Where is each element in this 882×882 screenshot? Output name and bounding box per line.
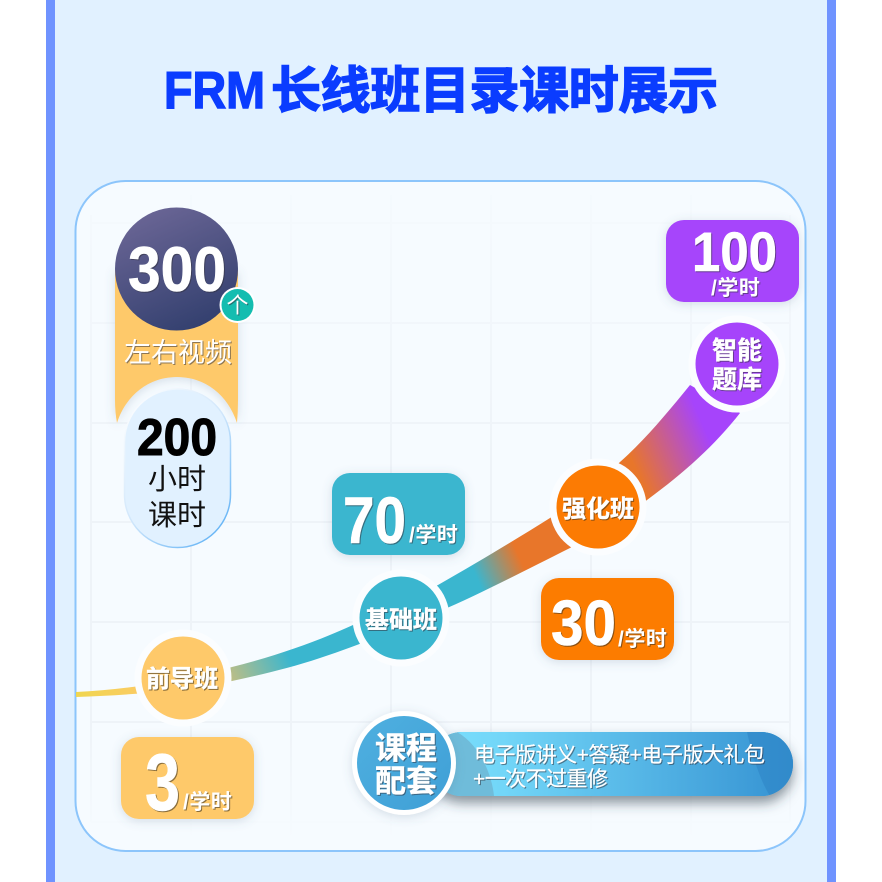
stage: 强化班: 强化班: [562, 496, 634, 523]
number: 300: 300: [128, 235, 226, 305]
hours box: 前导班 3: /学时: [183, 790, 232, 814]
title: 长线班目录课时展示: [271, 63, 718, 119]
pill: 200 hours: [124, 389, 230, 548]
stage: 智能题库: [688, 316, 786, 412]
seal: 课程配套: [352, 711, 456, 815]
course extras bar: 电子版讲义+答疑+电子版大礼包: [474, 744, 765, 767]
curve: learning path: [76, 385, 740, 697]
seal: 课程配套: 课程: [375, 731, 437, 766]
pill: 200 hours: 小时: [148, 463, 206, 496]
stage: 基础班: [352, 570, 450, 666]
hours box: 基础班 70: /学时: [409, 523, 458, 547]
label: 左右视频: 左右视频: [124, 338, 232, 368]
pill: 200 hours: 课时: [148, 499, 206, 532]
seal: 课程配套: 配套: [375, 764, 437, 799]
hours box: 强化班 30: /学时: [618, 627, 667, 651]
circle: 300: [115, 208, 238, 330]
badge: 个: 个: [226, 293, 249, 318]
stage: 前导班: [134, 630, 232, 726]
stage: 智能题库: 智能: [712, 337, 762, 365]
stage: 强化班: [550, 458, 646, 556]
stage: 智能题库: 题库: [712, 366, 762, 394]
hours box: 强化班 30: [541, 578, 674, 660]
pill: 200 hours: 200: [137, 409, 217, 467]
course extras bar: +一次不过重修: [473, 768, 608, 791]
badge: 个: [220, 287, 256, 323]
hours box: 前导班 3: 3: [145, 738, 180, 828]
hours box: 前导班 3: [121, 737, 254, 828]
hours box: 智能题库 100: [666, 220, 799, 302]
stage: 基础班: 基础班: [365, 607, 437, 634]
hours box: 智能题库 100: /学时: [711, 276, 760, 300]
title: FRM: [164, 62, 265, 120]
hours box: 基础班 70: 70: [343, 483, 406, 557]
hours box: 强化班 30: 30: [551, 587, 616, 659]
hours box: 基础班 70: [332, 473, 465, 557]
ribbon: [115, 270, 238, 423]
medal: video and hours totals: [115, 208, 256, 548]
panel: course hours: [76, 181, 806, 851]
hours box: 智能题库 100: 100: [692, 220, 777, 283]
stage: 前导班: 前导班: [146, 666, 218, 693]
course extras bar: [430, 732, 793, 796]
